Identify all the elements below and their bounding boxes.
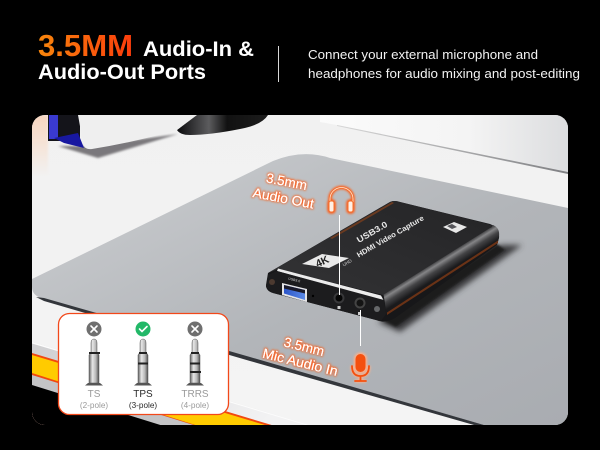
mat front edge — [36, 297, 484, 425]
USB port — [282, 277, 307, 302]
mic label: Mic Audio In — [261, 346, 339, 379]
icon: microphone — [352, 354, 369, 381]
audio out label — [252, 168, 319, 212]
device front face — [266, 271, 386, 321]
mic in jack — [354, 298, 366, 315]
callout line: mic in — [360, 310, 361, 346]
product scene panel — [30, 115, 568, 429]
audio out label: 3.5mm — [265, 170, 308, 193]
TRRS labels: (4-pole) — [181, 401, 209, 410]
device top face — [268, 201, 492, 295]
TS plug — [80, 322, 108, 410]
4K badge — [302, 254, 352, 268]
description text: Connect your external microphone and — [308, 48, 538, 62]
mic label: Mic Audio In — [261, 346, 339, 379]
HDMI Video Capture label: HDMI Video Capture — [355, 214, 425, 259]
TRRS labels: TRRS — [181, 389, 209, 400]
TPS labels — [129, 389, 157, 410]
title — [38, 28, 254, 84]
screws — [269, 279, 380, 312]
infographic canvas — [32, 34, 580, 425]
audio out label: 3.5mm — [265, 170, 308, 193]
panel: plug types — [58, 314, 228, 414]
4K badge: UHD — [342, 258, 353, 267]
title: 3.5MM — [38, 28, 133, 63]
jack icon: 2-pole — [85, 339, 103, 386]
audio out label: Audio Out — [252, 185, 315, 212]
USB 3.0 printed label: USB3.0 — [355, 219, 389, 245]
TPS plug — [129, 322, 157, 410]
jack icon: 4-pole — [186, 339, 204, 386]
audio out label: Audio Out — [252, 185, 315, 212]
monitor stand — [48, 115, 268, 158]
TPS labels: (3-pole) — [129, 401, 157, 410]
device body — [266, 201, 499, 322]
mic label: 3.5mm — [282, 334, 326, 359]
tail logo — [443, 222, 467, 233]
description text: headphones for audio mixing and post-editing — [308, 67, 580, 81]
icon: check — [136, 322, 150, 336]
TPS labels: TPS — [133, 389, 153, 400]
TRRS labels — [181, 389, 209, 410]
TS labels: TS — [88, 389, 101, 400]
device shadow — [378, 244, 522, 332]
jack icon: 3-pole — [134, 339, 152, 386]
upper shelf — [320, 115, 568, 174]
title: Audio-In & — [143, 37, 254, 61]
icon: cross — [188, 322, 202, 336]
title: Audio-Out Ports — [38, 60, 206, 84]
capture device — [266, 201, 499, 322]
TS labels: (2-pole) — [80, 401, 108, 410]
TS labels — [80, 389, 108, 410]
mic label: 3.5mm — [282, 334, 326, 359]
desk mat — [32, 154, 568, 425]
desk front edge with yellow strip — [32, 342, 294, 425]
4K badge: 4K — [314, 253, 331, 270]
description text — [308, 48, 580, 81]
callout line: audio out — [339, 215, 340, 295]
icon: cross — [86, 322, 102, 336]
icon: headphones — [329, 188, 353, 212]
USB port: USB3.0 — [288, 277, 301, 283]
audio out jack — [334, 292, 344, 309]
TRRS plug — [181, 322, 209, 410]
device side highlight — [383, 225, 499, 314]
